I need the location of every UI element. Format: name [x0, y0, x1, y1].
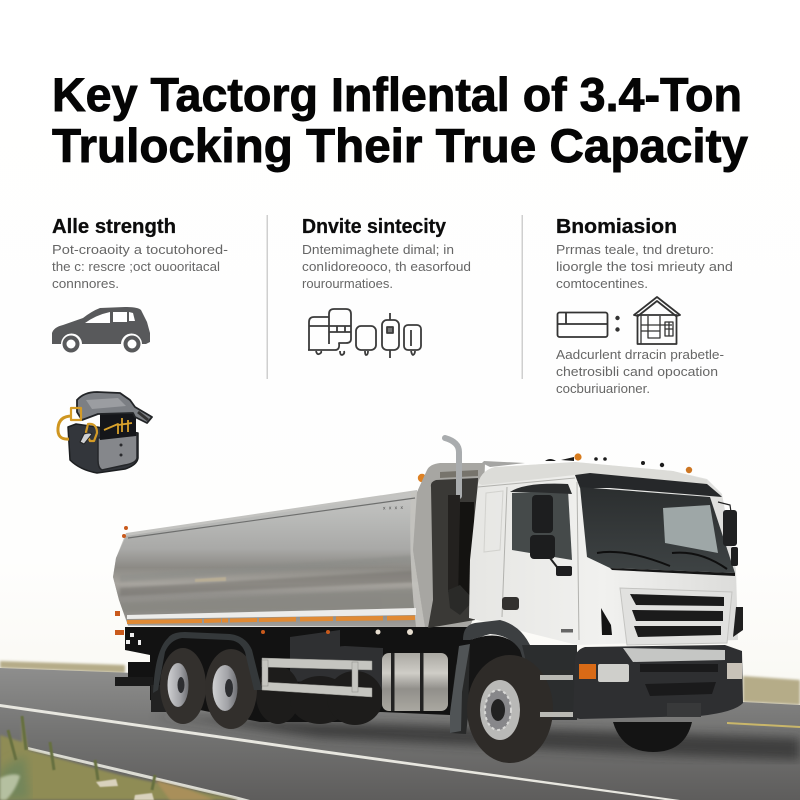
text block: economics intro: Prrmas teale, tnd dreturo:: [556, 242, 714, 257]
text block: economics intro: comtocentines.: [556, 276, 648, 291]
cab door lines: [478, 478, 579, 640]
icon: panel and house: [558, 297, 680, 344]
roadside grass: [0, 716, 240, 800]
front tyre right: [613, 722, 692, 752]
tank: [113, 474, 426, 645]
text block: economics intro: lioorgle the tosi mrieuty and: [556, 259, 733, 274]
cab roof: [478, 462, 708, 487]
panel: drive sensitivity: [302, 216, 471, 358]
sky reflection: [663, 505, 718, 553]
heading: drive sensitivity: Dnvite sintecity: [302, 216, 447, 238]
steps: [540, 675, 573, 717]
truck ground shadow: [150, 716, 800, 760]
side guard: [262, 658, 372, 697]
front tyre left: [467, 655, 553, 763]
bumper: [573, 645, 743, 719]
rear tyre two: [205, 649, 257, 729]
front left mudguard: [450, 644, 470, 733]
cab rear housing: [413, 463, 485, 628]
icon: car: [52, 307, 150, 352]
right fairing: [733, 607, 743, 637]
heading: axle strength: Alle strength: [52, 216, 176, 238]
title: Trulocking Their True Capacity: [52, 119, 748, 172]
front fender rear panel: [450, 645, 470, 734]
text block: axle strength: the c: rescre ;oct ouooritacal: [52, 259, 220, 274]
icon: containers: [308, 309, 421, 358]
icon: axle gearbox: [58, 392, 152, 473]
text block: drive sensitivity: rourourmatioes.: [302, 276, 393, 291]
wipers: [597, 552, 727, 569]
rear lights: [115, 474, 426, 635]
middle tyres: [256, 666, 383, 725]
text block: drive sensitivity: [302, 242, 471, 291]
rear panel inset: [484, 491, 503, 552]
tank top seam: [128, 498, 415, 538]
panel: economics: [556, 216, 733, 396]
road edge line: [28, 747, 250, 800]
wheel arch: [463, 620, 541, 687]
rear tyre one: [160, 648, 206, 724]
arch interior: [468, 636, 540, 720]
divider left: [266, 215, 268, 379]
scene: road and roadside: [0, 661, 800, 800]
cab body: [469, 462, 743, 645]
grille panel: [620, 588, 732, 645]
road surface: [0, 668, 800, 800]
title: Key Tactorg Inflental of 3.4-Ton: [52, 68, 742, 121]
cab lower panel: [522, 645, 577, 720]
text block: economics note: cocburiuarioner.: [556, 381, 650, 396]
road yellow line: [727, 722, 800, 728]
windshield: [580, 487, 735, 573]
tank end highlight: [410, 514, 425, 627]
mudflap: [151, 685, 166, 712]
text block: axle strength: [52, 242, 228, 291]
badge: [561, 629, 573, 632]
chassis boxes: [290, 630, 383, 700]
heading: economics: Bnomiasion: [556, 216, 677, 238]
text block: economics intro: [556, 242, 733, 291]
panel: axle strength: [52, 216, 228, 473]
text block: economics note: chetrosibli cand opocation: [556, 364, 718, 379]
far verge: [0, 661, 800, 705]
chassis: [125, 627, 480, 722]
side window: [512, 490, 572, 560]
text block: economics note: Aadcurlent drracin prabetle-: [556, 347, 724, 362]
roof markers: [482, 453, 692, 473]
grille slots: [630, 594, 724, 637]
side vent: [601, 608, 612, 635]
rear bumper: [115, 677, 153, 686]
truck: [113, 438, 743, 763]
text block: axle strength: Pot-croaoity a tocutohored-: [52, 242, 228, 257]
fuel tank: [382, 653, 448, 711]
divider right: [522, 215, 523, 379]
visor: [575, 473, 722, 497]
title: [52, 68, 748, 172]
tank marking: xxxx: [383, 505, 403, 512]
text block: drive sensitivity: Dntemimaghete dimal; in: [302, 242, 454, 257]
mudguard: [153, 632, 262, 693]
rear bracket pattern: [126, 633, 141, 645]
white stripe: [127, 608, 416, 619]
road centre line: [0, 704, 680, 800]
text block: economics note: [556, 347, 724, 396]
door handle: [502, 597, 519, 610]
text block: drive sensitivity: conIidoreooco, th easorfoud: [302, 259, 471, 274]
exhaust stack: [445, 438, 474, 615]
text block: axle strength: connnores.: [52, 276, 119, 291]
mirrors: [530, 495, 738, 576]
orange reflective stripe: [127, 616, 415, 624]
